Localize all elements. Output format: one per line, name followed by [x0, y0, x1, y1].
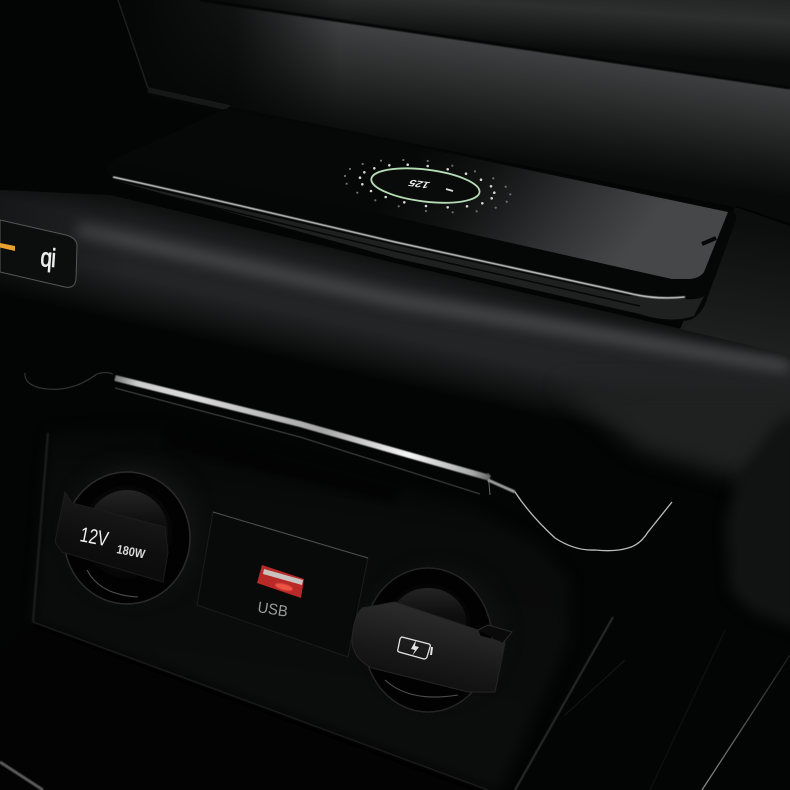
battery icon [398, 637, 432, 659]
USB label: USB [256, 599, 289, 621]
12V label: 12V [78, 522, 111, 551]
USB port [257, 565, 304, 598]
lower console panel [33, 425, 570, 790]
charging dots [344, 159, 511, 213]
orange indicator [0, 243, 15, 251]
lower tray and console lines [0, 617, 790, 790]
fascia band under the phone [0, 185, 790, 500]
12V socket [55, 466, 197, 604]
battery indicator [446, 189, 453, 191]
qi symbol: qi [40, 243, 56, 273]
charging ring [369, 163, 481, 208]
180W label: 180W [115, 543, 147, 562]
panel: wireless charging phone [106, 108, 736, 321]
chrome trim strip [25, 372, 672, 551]
qi wireless charging button [0, 220, 77, 287]
battery socket [352, 568, 512, 712]
upper dashboard panel [118, 0, 790, 227]
phone clock text: 125 [407, 177, 432, 189]
charging pad floor beside the phone [680, 207, 790, 356]
knob at the right edge [725, 410, 790, 630]
battery cap [352, 602, 505, 692]
12V cap [55, 492, 168, 582]
USB panel [197, 512, 368, 657]
